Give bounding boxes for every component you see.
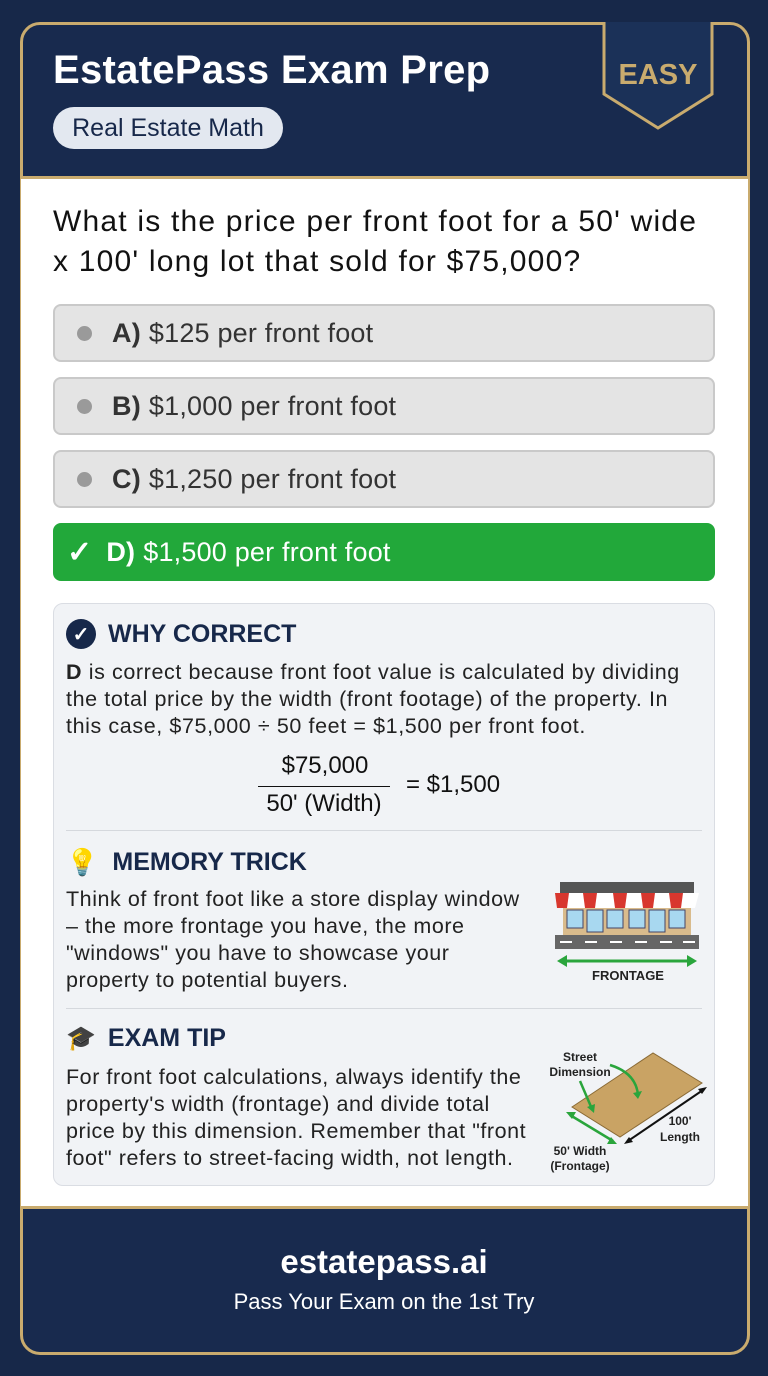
formula: $75,000 xyxy=(282,752,368,779)
why correct heading: ✓ xyxy=(73,624,89,646)
option D correct: ✓ xyxy=(67,536,92,568)
icon: storefront xyxy=(555,882,699,983)
memory trick text: – the more frontage you have, the more xyxy=(66,914,465,938)
formula xyxy=(258,752,500,817)
option A: $125 per front foot xyxy=(149,318,373,348)
category pill: Real Estate Math xyxy=(72,114,264,142)
formula: 50' (Width) xyxy=(266,790,382,817)
difficulty badge xyxy=(602,22,714,130)
icon: lot diagram xyxy=(549,1050,707,1173)
icon: lot diagram: (Frontage) xyxy=(550,1159,610,1173)
memory trick text xyxy=(66,887,520,992)
option C: C) xyxy=(112,464,141,494)
exam tip text: price by this dimension. Remember that "front xyxy=(66,1119,526,1143)
why correct text: D is correct because front foot value is calculated by dividing xyxy=(66,660,680,684)
formula: = $1,500 xyxy=(406,771,500,798)
explanation panel xyxy=(53,603,715,1186)
option C: $1,250 per front foot xyxy=(149,464,396,494)
white content panel xyxy=(21,176,748,1209)
title: EstatePass Exam Prep xyxy=(53,48,490,92)
question xyxy=(53,205,697,278)
option C xyxy=(53,450,715,508)
option D correct: $1,500 per front foot xyxy=(143,536,391,566)
question: x 100' long lot that sold for $75,000? xyxy=(53,245,581,278)
exam tip text xyxy=(66,1065,526,1170)
memory trick heading: MEMORY TRICK xyxy=(112,848,307,876)
icon: lot diagram: 50' Width xyxy=(554,1144,606,1158)
memory trick text: "windows" you have to showcase your xyxy=(66,941,449,965)
footer brand: estatepass.ai xyxy=(280,1243,488,1280)
memory trick heading: 💡 xyxy=(66,847,98,877)
option A xyxy=(53,304,715,362)
why correct text xyxy=(66,660,680,738)
option B: B) xyxy=(112,390,141,420)
option D correct: D) xyxy=(106,536,135,566)
exam tip text: For front foot calculations, always identify the xyxy=(66,1065,521,1089)
icon: lot diagram: Dimension xyxy=(549,1065,611,1079)
category pill xyxy=(53,107,283,149)
icon: lot diagram: Length xyxy=(660,1130,700,1144)
question: What is the price per front foot for a 50' wide xyxy=(53,205,697,238)
memory trick text: property to potential buyers. xyxy=(66,968,348,992)
memory trick text: Think of front foot like a store display window xyxy=(66,887,520,911)
option D correct xyxy=(53,523,715,581)
why correct text: the total price by the width (front footage) of the property. In xyxy=(66,687,668,711)
why correct heading: WHY CORRECT xyxy=(108,620,296,648)
exam tip heading: 🎓 xyxy=(66,1025,96,1052)
exam tip text: property's width (frontage) and divide total xyxy=(66,1092,490,1116)
icon: storefront: FRONTAGE xyxy=(592,968,664,983)
option A: A) xyxy=(112,318,141,348)
option B xyxy=(53,377,715,435)
footer tagline: Pass Your Exam on the 1st Try xyxy=(234,1289,534,1314)
icon: lot diagram: 100' xyxy=(669,1114,692,1128)
icon: lot diagram: Street xyxy=(563,1050,597,1064)
exam tip text: foot" refers to street-facing width, not length. xyxy=(66,1146,514,1170)
option B: $1,000 per front foot xyxy=(149,390,396,420)
difficulty badge: EASY xyxy=(619,59,697,91)
exam tip heading: EXAM TIP xyxy=(108,1024,226,1052)
why correct text: this case, $75,000 ÷ 50 feet = $1,500 per front foot. xyxy=(66,714,586,738)
